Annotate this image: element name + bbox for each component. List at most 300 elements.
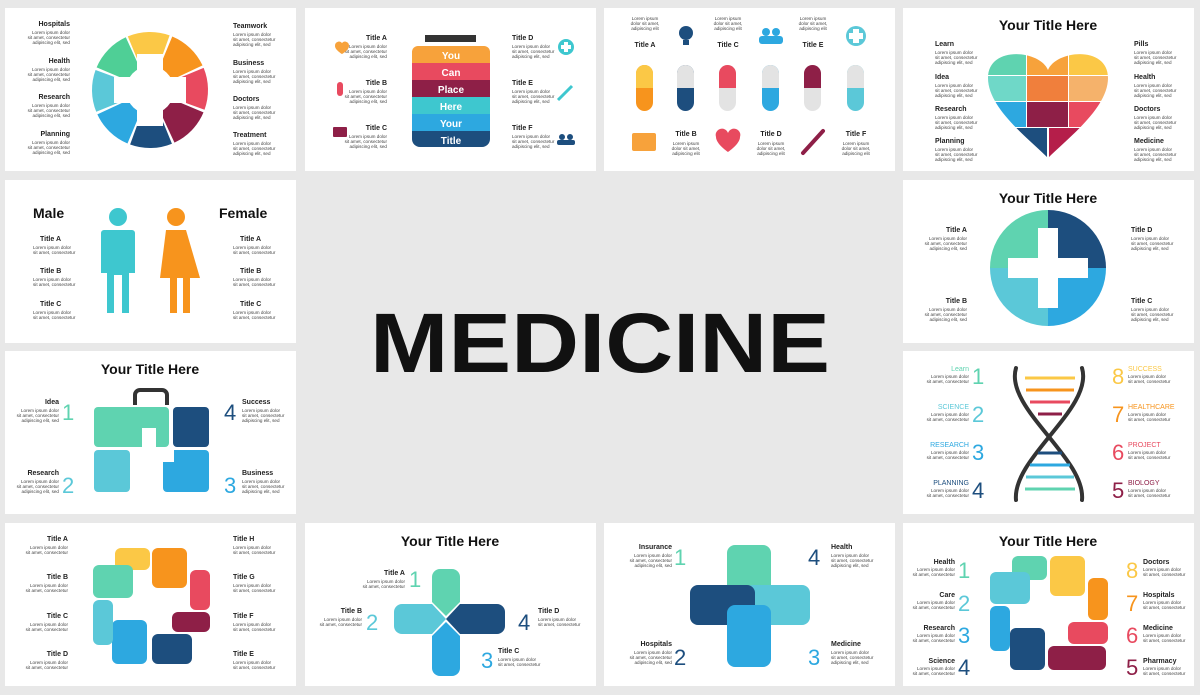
panel: interlocking cross: Health: [831, 544, 852, 551]
panel: circle cross: Title B: [946, 298, 967, 305]
panel: bag: 4: [224, 400, 236, 425]
panel: petal cross: sit amet, consectetur: [320, 622, 362, 627]
panel: male female: Lorem ipsum dolor: [33, 310, 72, 315]
panel: interlocking cross: [604, 523, 895, 686]
panel: square cross numbered: Care: [939, 592, 955, 599]
panel: male female: Female: [219, 205, 267, 221]
panel: bag: 2: [62, 473, 74, 498]
panel: jar: sit amet, consectetur: [345, 139, 387, 144]
panel: jar: sit amet, consectetur: [345, 94, 387, 99]
panel: square cross numbered: Lorem ipsum dolor: [917, 633, 955, 638]
panel: circle cross: adipiscing elit, sed: [929, 246, 967, 251]
panel: male female: Lorem ipsum dolor: [233, 277, 272, 282]
panel: jar: Here: [440, 102, 463, 113]
panel: ring cross: sit amet, consectetur: [28, 72, 70, 77]
panel: interlocking cross: adipiscing elit, sed: [634, 563, 672, 568]
panel: male female: sit amet, consectetur: [33, 250, 76, 255]
panel: dna: Lorem ipsum dolor: [931, 450, 969, 455]
panel: petal cross: Lorem ipsum dolor: [324, 617, 362, 622]
panel: heart: sit amet, consectetur: [935, 152, 978, 157]
panel: heart: Research: [935, 106, 967, 113]
panel: pills: Lorem ipsum: [800, 16, 826, 21]
panel: heart: Lorem ipsum dolor: [1134, 115, 1173, 120]
panel: heart: Lorem ipsum dolor: [1134, 147, 1173, 152]
panel: square cross numbered: 7: [1126, 591, 1138, 616]
panel: jar: You: [442, 51, 460, 62]
panel: heart: sit amet, consectetur: [935, 120, 978, 125]
panel: square cross numbered: Medicine: [1143, 625, 1173, 632]
panel: dna: Lorem ipsum dolor: [931, 374, 969, 379]
panel: bag: adipiscing elit, sed: [21, 489, 59, 494]
panel: male female: Lorem ipsum dolor: [233, 310, 272, 315]
panel: square cross numbered: sit amet, consectetur: [913, 572, 955, 577]
panel: petal cross: 1: [409, 567, 421, 592]
panel: square cross 8: sit amet, consectetur: [26, 627, 68, 632]
panel: jar: Title D: [512, 35, 533, 42]
panel: heart: sit amet, consectetur: [935, 88, 978, 93]
panel: ring cross: sit amet, consectetur: [28, 108, 70, 113]
panel: heart: Idea: [935, 74, 949, 81]
panel: male female: sit amet, consectetur: [233, 315, 276, 320]
panel: pills: dolor sit amet,: [799, 21, 827, 26]
panel: petal cross: [305, 523, 596, 686]
panel: ring cross: adipiscing elit, sed: [233, 79, 271, 84]
panel: heart: sit amet, consectetur: [1134, 120, 1177, 125]
panel: jar: Title F: [512, 125, 533, 132]
panel: pills: Title F: [846, 131, 867, 138]
panel: bag: Lorem ipsum dolor: [242, 408, 281, 413]
panel: interlocking cross: 2: [674, 645, 686, 670]
panel: circle cross: Lorem ipsum dolor: [1131, 236, 1170, 241]
panel: heart: Medicine: [1134, 138, 1164, 145]
panel: heart: Lorem ipsum dolor: [935, 50, 974, 55]
panel: ring cross: [5, 8, 296, 171]
panel: jar: Place: [438, 85, 465, 96]
panel: interlocking cross: 4: [808, 545, 820, 570]
panel: heart: Lorem ipsum dolor: [935, 147, 974, 152]
panel: pills: Lorem ipsum: [758, 141, 784, 146]
panel: petal cross: Lorem ipsum dolor: [498, 657, 537, 662]
panel: ring cross: sit amet, consectetur: [233, 37, 276, 42]
panel: bag: Idea: [45, 399, 59, 406]
panel: pills: Lorem ipsum: [673, 141, 699, 146]
panel: male female: Title B: [240, 268, 261, 275]
panel: pills: dolor sit amet,: [842, 146, 870, 151]
panel: male female: Title A: [240, 236, 261, 243]
panel: square cross 8: Lorem ipsum dolor: [30, 583, 68, 588]
panel: ring cross: Lorem ipsum dolor: [32, 103, 70, 108]
panel: petal cross: Title B: [341, 608, 362, 615]
panel: square cross 8: sit amet, consectetur: [26, 588, 68, 593]
panel: square cross 8: [5, 523, 296, 686]
panel: heart: adipiscing elit, sed: [1134, 157, 1172, 162]
panel: male female: sit amet, consectetur: [33, 282, 76, 287]
panel: heart: adipiscing elit, sed: [1134, 125, 1172, 130]
panel: interlocking cross: sit amet, consectetur: [630, 655, 672, 660]
ring chart: [96, 36, 204, 144]
panel: heart: adipiscing elit, sed: [935, 125, 973, 130]
panel: petal cross: 4: [518, 610, 530, 635]
panel: ring cross: Lorem ipsum dolor: [32, 140, 70, 145]
panel: jar: Title E: [512, 80, 533, 87]
panel: square cross numbered: 4: [958, 655, 970, 680]
panel: bag: Lorem ipsum dolor: [21, 479, 59, 484]
panel: bag: adipiscing elit, sed: [242, 489, 280, 494]
panel: ring cross: Business: [233, 60, 264, 67]
panel: dna: HEALTHCARE: [1128, 404, 1175, 411]
panel: petal cross: Title A: [384, 570, 405, 577]
panel: male female: sit amet, consectetur: [233, 250, 276, 255]
panel: pills: dolor sit amet,: [672, 146, 700, 151]
panel: dna: RESEARCH: [930, 442, 969, 449]
panel: interlocking cross: sit amet, consectetur: [831, 655, 874, 660]
panel: ring cross: adipiscing elit, sed: [32, 113, 70, 118]
panel: ring cross: adipiscing elit, sed: [233, 115, 271, 120]
panel: square cross numbered: sit amet, consectetur: [913, 605, 955, 610]
panel: square cross 8: Title D: [47, 651, 68, 658]
panel: pills: Lorem ipsum: [843, 141, 869, 146]
panel: male female: Lorem ipsum dolor: [233, 245, 272, 250]
panel: interlocking cross: Hospitals: [640, 641, 672, 648]
panel: pills: Title B: [675, 131, 697, 138]
panel: ring cross: Health: [49, 58, 70, 65]
panel: square cross 8: Lorem ipsum dolor: [30, 545, 68, 550]
panel: jar: Title B: [366, 80, 387, 87]
panel: pills: adipiscing elit: [799, 26, 828, 31]
panel: heart: Lorem ipsum dolor: [1134, 83, 1173, 88]
panel: dna: SCIENCE: [938, 404, 969, 411]
panel: jar: adipiscing elit, sed: [512, 54, 550, 59]
panel: square cross numbered: [903, 523, 1194, 686]
panel: ring cross: adipiscing elit, sed: [233, 151, 271, 156]
panel: heart: adipiscing elit, sed: [935, 93, 973, 98]
panel: interlocking cross: sit amet, consectetur: [630, 558, 672, 563]
panel: dna: Learn: [951, 366, 969, 373]
panel: pills: adipiscing elit: [842, 151, 871, 156]
panel: dna: sit amet, consectetur: [1128, 493, 1171, 498]
panel: square cross numbered: 8: [1126, 558, 1138, 583]
panel: square cross numbered: Hospitals: [1143, 592, 1175, 599]
panel: dna: [903, 351, 1194, 514]
panel: square cross 8: Lorem ipsum dolor: [30, 660, 68, 665]
panel: bag: sit amet, consectetur: [242, 484, 285, 489]
panel: square cross numbered: sit amet, consectetur: [1143, 572, 1186, 577]
panel: ring cross: adipiscing elit, sed: [32, 77, 70, 82]
panel: jar: Title: [441, 136, 462, 147]
panel: jar: Title C: [366, 125, 387, 132]
panel: heart: sit amet, consectetur: [1134, 152, 1177, 157]
panel: square cross numbered: sit amet, consectetur: [1143, 671, 1186, 676]
panel: dna: Lorem ipsum dolor: [1128, 488, 1167, 493]
panel: pills: [604, 8, 895, 171]
panel: square cross 8: Title E: [233, 651, 254, 658]
panel: circle cross: adipiscing elit, sed: [1131, 317, 1169, 322]
panel: circle cross: Title A: [946, 227, 967, 234]
panel: ring cross: Lorem ipsum dolor: [32, 67, 70, 72]
panel: male female: Lorem ipsum dolor: [33, 277, 72, 282]
panel: heart: Planning: [935, 138, 965, 145]
panel: jar: Lorem ipsum dolor: [512, 134, 551, 139]
panel: bag: sit amet, consectetur: [242, 413, 285, 418]
panel: heart: adipiscing elit, sed: [935, 157, 973, 162]
panel: interlocking cross: Lorem ipsum dolor: [831, 553, 870, 558]
panel: square cross numbered: Lorem ipsum dolor: [1143, 567, 1182, 572]
panel: heart: Doctors: [1134, 106, 1161, 113]
panel: circle cross: sit amet, consectetur: [1131, 312, 1174, 317]
panel: dna: Lorem ipsum dolor: [1128, 412, 1167, 417]
panel: petal cross: 3: [481, 648, 493, 673]
panel: heart: Pills: [1134, 41, 1149, 48]
panel: ring cross: sit amet, consectetur: [233, 74, 276, 79]
panel: ring cross: sit amet, consectetur: [28, 145, 70, 150]
panel: jar: Lorem ipsum dolor: [512, 89, 551, 94]
panel: male female: Title B: [40, 268, 61, 275]
panel: interlocking cross: Medicine: [831, 641, 861, 648]
panel: square cross numbered: Lorem ipsum dolor: [917, 567, 955, 572]
panel: circle cross: sit amet, consectetur: [925, 312, 967, 317]
panel: heart: [903, 8, 1194, 171]
panel: pills: Title C: [717, 42, 739, 49]
panel: dna: 2: [972, 402, 984, 427]
panel: petal cross: sit amet, consectetur: [498, 662, 541, 667]
panel: bag: adipiscing elit, sed: [242, 418, 280, 423]
panel: circle cross: Lorem ipsum dolor: [929, 236, 967, 241]
panel: ring cross: Lorem ipsum dolor: [233, 105, 272, 110]
panel: heart: sit amet, consectetur: [1134, 55, 1177, 60]
panel: pills: dolor sit amet,: [631, 21, 659, 26]
panel: heart: Lorem ipsum dolor: [935, 83, 974, 88]
panel: pills: Title E: [803, 42, 824, 49]
panel: ring cross: sit amet, consectetur: [233, 110, 276, 115]
panel: pills: adipiscing elit: [631, 26, 660, 31]
panel: pills: adipiscing elit: [714, 26, 743, 31]
panel: ring cross: sit amet, consectetur: [28, 35, 70, 40]
panel: bag: adipiscing elit, sed: [21, 418, 59, 423]
panel: square cross 8: Title F: [233, 613, 254, 620]
panel: jar: sit amet, consectetur: [512, 49, 555, 54]
panel: jar: Your: [440, 119, 462, 130]
panel: jar: sit amet, consectetur: [512, 94, 555, 99]
panel: square cross numbered: Pharmacy: [1143, 658, 1177, 665]
panel: jar: adipiscing elit, sed: [349, 144, 387, 149]
panel: petal cross: sit amet, consectetur: [538, 622, 581, 627]
panel: square cross numbered: 3: [958, 623, 970, 648]
panel: interlocking cross: adipiscing elit, sed: [831, 660, 869, 665]
panel: jar: Lorem ipsum dolor: [349, 89, 387, 94]
panel: dna: Lorem ipsum dolor: [1128, 450, 1167, 455]
panel: dna: PLANNING: [933, 480, 969, 487]
panel: heart: Lorem ipsum dolor: [1134, 50, 1173, 55]
panel: ring cross: Hospitals: [38, 21, 70, 28]
panel: pills: Title A: [634, 42, 656, 49]
panel: heart: adipiscing elit, sed: [935, 60, 973, 65]
panel: square cross 8: Lorem ipsum dolor: [233, 583, 272, 588]
panel: petal cross: 2: [366, 610, 378, 635]
panel: ring cross: adipiscing elit, sed: [32, 150, 70, 155]
panel: square cross numbered: 6: [1126, 623, 1138, 648]
panel: petal cross: sit amet, consectetur: [363, 584, 405, 589]
panel: bag: Your Title Here: [101, 361, 199, 377]
panel: bag: Success: [242, 399, 271, 406]
panel: square cross 8: Lorem ipsum dolor: [233, 660, 272, 665]
panel: dna: 6: [1112, 440, 1124, 465]
panel: square cross numbered: Doctors: [1143, 559, 1170, 566]
panel: square cross 8: Title G: [233, 574, 255, 581]
panel: dna: Lorem ipsum dolor: [931, 412, 969, 417]
panel: dna: 3: [972, 440, 984, 465]
panel: jar: Lorem ipsum dolor: [512, 44, 551, 49]
panel: heart: Learn: [935, 41, 954, 48]
panel: square cross numbered: Lorem ipsum dolor: [917, 666, 955, 671]
panel: interlocking cross: Lorem ipsum dolor: [634, 553, 672, 558]
panel: square cross 8: Lorem ipsum dolor: [233, 622, 272, 627]
panel: dna: 8: [1112, 364, 1124, 389]
panel: ring cross: Lorem ipsum dolor: [32, 30, 70, 35]
panel: interlocking cross: 3: [808, 645, 820, 670]
panel: interlocking cross: Insurance: [639, 544, 672, 551]
panel: dna: 1: [972, 364, 984, 389]
panel: square cross numbered: sit amet, consectetur: [913, 671, 955, 676]
panel: heart: sit amet, consectetur: [935, 55, 978, 60]
panel: jar: sit amet, consectetur: [512, 139, 555, 144]
panel: heart: Your Title Here: [999, 17, 1097, 33]
panel: jar: Can: [442, 68, 460, 79]
panel: bag: sit amet, consectetur: [17, 413, 59, 418]
panel: petal cross: Lorem ipsum dolor: [538, 617, 577, 622]
panel: dna: sit amet, consectetur: [927, 455, 969, 460]
panel: petal cross: Your Title Here: [401, 533, 499, 549]
panel: dna: SUCCESS: [1128, 366, 1162, 373]
panel: dna: sit amet, consectetur: [927, 379, 969, 384]
panel: pills: dolor sit amet,: [757, 146, 785, 151]
panel: square cross numbered: Lorem ipsum dolor: [1143, 600, 1182, 605]
panel: square cross 8: Lorem ipsum dolor: [233, 545, 272, 550]
panel: heart: adipiscing elit, sed: [1134, 93, 1172, 98]
panel: pills: dolor sit amet,: [714, 21, 742, 26]
panel: bag: 1: [62, 400, 74, 425]
panel: circle cross: [903, 180, 1194, 343]
panel: square cross numbered: 5: [1126, 655, 1138, 680]
panel: square cross numbered: Lorem ipsum dolor: [917, 600, 955, 605]
panel: dna: 7: [1112, 402, 1124, 427]
panel: dna: 4: [972, 478, 984, 503]
panel: jar: adipiscing elit, sed: [349, 99, 387, 104]
panel: male female: Male: [33, 205, 64, 221]
panel: dna: 5: [1112, 478, 1124, 503]
panel: dna: sit amet, consectetur: [927, 417, 969, 422]
panel: dna: sit amet, consectetur: [1128, 379, 1171, 384]
panel: dna: sit amet, consectetur: [1128, 417, 1171, 422]
panel: bag: sit amet, consectetur: [17, 484, 59, 489]
panel: ring cross: adipiscing elit, sed: [233, 42, 271, 47]
panel: male female: sit amet, consectetur: [33, 315, 76, 320]
panel: ring cross: Lorem ipsum dolor: [233, 69, 272, 74]
panel: circle cross: Lorem ipsum dolor: [929, 307, 967, 312]
panel: square cross 8: sit amet, consectetur: [26, 665, 68, 670]
panel: interlocking cross: adipiscing elit, sed: [831, 563, 869, 568]
panel: jar: sit amet, consectetur: [345, 49, 387, 54]
panel: jar: Lorem ipsum dolor: [349, 44, 387, 49]
panel: ring cross: Doctors: [233, 96, 260, 103]
panel: square cross 8: sit amet, consectetur: [233, 627, 276, 632]
panel: male female: Title C: [240, 301, 261, 308]
panel: ring cross: Lorem ipsum dolor: [233, 141, 272, 146]
panel: pills: adipiscing elit: [757, 151, 786, 156]
panel: square cross numbered: sit amet, consectetur: [1143, 638, 1186, 643]
title: MEDICINE: [370, 296, 830, 390]
panel: male female: Lorem ipsum dolor: [33, 245, 72, 250]
panel: square cross numbered: Research: [923, 625, 955, 632]
panel: dna: PROJECT: [1128, 442, 1161, 449]
panel: dna: sit amet, consectetur: [927, 493, 969, 498]
panel: jar: Title A: [366, 35, 387, 42]
panel: square cross numbered: Science: [929, 658, 955, 665]
panel: petal cross: Title D: [538, 608, 559, 615]
panel: bag: 3: [224, 473, 236, 498]
panel: male female: Title C: [40, 301, 61, 308]
panel: circle cross: Title C: [1131, 298, 1152, 305]
panel: jar: Lorem ipsum dolor: [349, 134, 387, 139]
panel: bag: Lorem ipsum dolor: [21, 408, 59, 413]
panel: pills: Lorem ipsum: [715, 16, 741, 21]
panel: heart: adipiscing elit, sed: [1134, 60, 1172, 65]
panel: male female: Title A: [40, 236, 61, 243]
panel: dna: Lorem ipsum dolor: [1128, 374, 1167, 379]
panel: pills: adipiscing elit: [672, 151, 701, 156]
panel: male female: sit amet, consectetur: [233, 282, 276, 287]
panel: square cross 8: Title B: [47, 574, 68, 581]
panel: male female: [5, 180, 296, 343]
panel: jar: [305, 8, 596, 171]
panel: square cross numbered: 1: [958, 558, 970, 583]
panel: bag: Research: [27, 470, 59, 477]
panel: circle cross: Title D: [1131, 227, 1152, 234]
panel: petal cross: Lorem ipsum dolor: [367, 579, 405, 584]
panel: heart: sit amet, consectetur: [1134, 88, 1177, 93]
panel: interlocking cross: Lorem ipsum dolor: [634, 650, 672, 655]
panel: dna: BIOLOGY: [1128, 480, 1160, 487]
panel: ring cross: sit amet, consectetur: [233, 146, 276, 151]
panel: ring cross: adipiscing elit, sed: [32, 40, 70, 45]
panel: bag: [5, 351, 296, 514]
panel: ring cross: Teamwork: [233, 23, 267, 30]
panel: square cross numbered: sit amet, consectetur: [1143, 605, 1186, 610]
panel: square cross numbered: Lorem ipsum dolor: [1143, 666, 1182, 671]
panel: heart: Health: [1134, 74, 1155, 81]
panel: square cross 8: Lorem ipsum dolor: [30, 622, 68, 627]
panel: square cross numbered: Health: [934, 559, 955, 566]
panel: interlocking cross: Lorem ipsum dolor: [831, 650, 870, 655]
panel: interlocking cross: 1: [674, 545, 686, 570]
panel: ring cross: Lorem ipsum dolor: [233, 32, 272, 37]
panel: square cross numbered: Lorem ipsum dolor: [1143, 633, 1182, 638]
panel: interlocking cross: adipiscing elit, sed: [634, 660, 672, 665]
panel: circle cross: Lorem ipsum dolor: [1131, 307, 1170, 312]
panel: jar: adipiscing elit, sed: [512, 144, 550, 149]
panel: interlocking cross: sit amet, consectetur: [831, 558, 874, 563]
panel: square cross 8: Title A: [47, 536, 68, 543]
panel: square cross 8: sit amet, consectetur: [233, 550, 276, 555]
panel: dna: sit amet, consectetur: [1128, 455, 1171, 460]
panel: dna: Lorem ipsum dolor: [931, 488, 969, 493]
panel: circle cross: sit amet, consectetur: [1131, 241, 1174, 246]
panel: square cross 8: sit amet, consectetur: [233, 588, 276, 593]
panel: ring cross: Planning: [40, 131, 70, 138]
panel: ring cross: Research: [38, 94, 70, 101]
panel: circle cross: sit amet, consectetur: [925, 241, 967, 246]
panel: circle cross: adipiscing elit, sed: [1131, 246, 1169, 251]
panel: square cross numbered: 2: [958, 591, 970, 616]
